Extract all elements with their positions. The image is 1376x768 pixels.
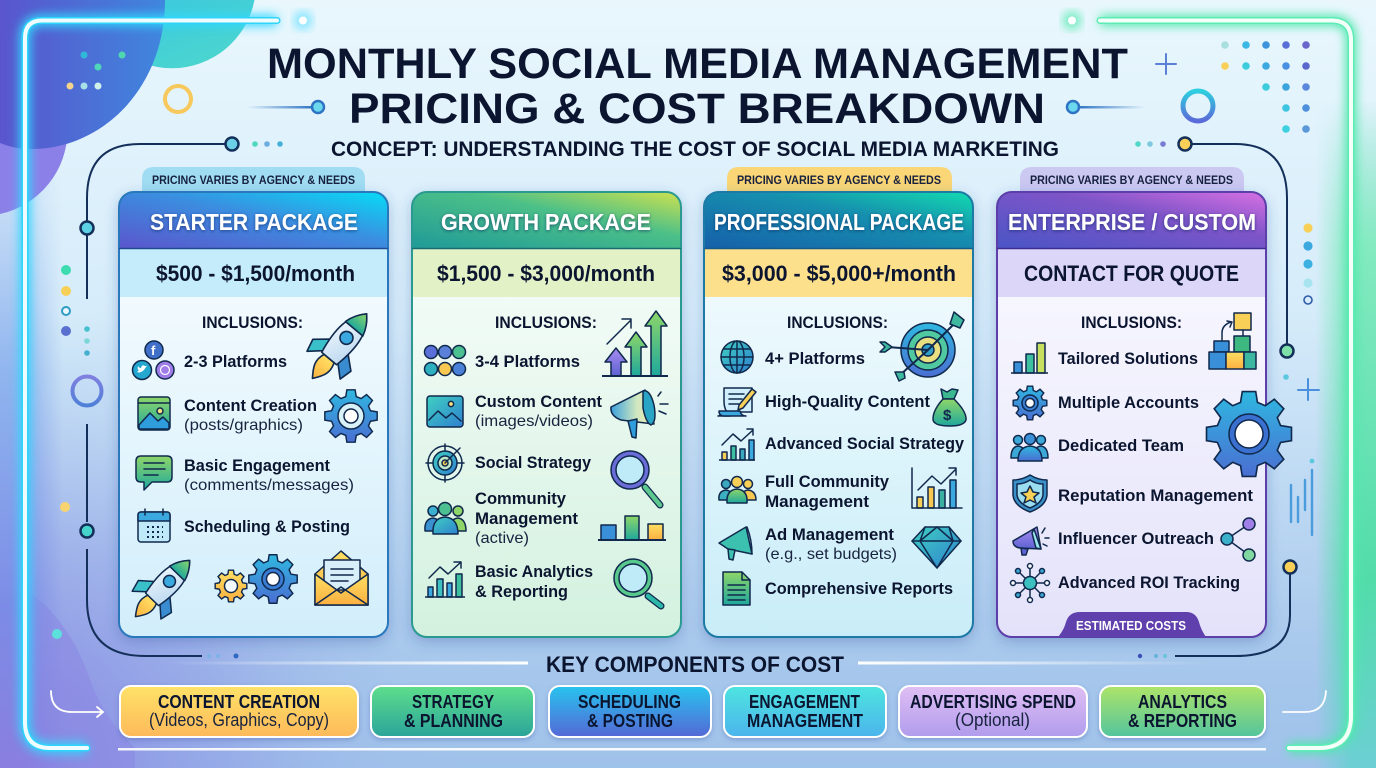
icon: globe [721,341,753,373]
icon: growth arrows [602,311,668,376]
icon: small bars [598,516,666,540]
inclusion: platforms: 2-3 Platforms [184,352,287,371]
pricing tab: PRICING VARIES BY AGENCY & NEEDS [737,173,941,187]
icon: small gear [1013,386,1047,420]
heading: PROFESSIONAL PACKAGE [714,209,964,235]
arrow left into components [51,691,103,717]
inclusion: high-quality content: High-Quality Content [765,392,930,411]
inclusion: full community management: Full Community [765,472,890,491]
inclusions label: INCLUSIONS: [202,313,303,332]
icon: money bag: $ [943,407,952,424]
icon: large gear [1207,392,1291,476]
icon: rising chart [719,429,755,460]
inclusion: basic engagement: (comments/messages) [184,477,354,494]
price: $500 - $1,500/month [156,261,355,286]
pricing tab [1020,167,1244,191]
inclusions label: INCLUSIONS: [1081,313,1182,332]
inclusion: dedicated team: Dedicated Team [1058,436,1184,455]
estimated costs tab [1058,612,1206,637]
panel: starter package [119,167,388,637]
heading: ENTERPRISE / CUSTOM [1008,209,1256,235]
plus sign right [1283,374,1319,400]
inclusion: basic engagement [184,456,354,494]
price: $1,500 - $3,000/month [437,261,655,286]
inclusion: basic analytics: Basic Analytics [475,562,593,581]
plus sign top-right [1156,54,1176,74]
pricing tab [727,167,952,191]
icon: gear with target [325,390,377,442]
inclusion: advanced roi tracking: Advanced ROI Tracking [1058,573,1240,592]
inclusion: community management: Community [475,489,567,508]
equalizer lines right [1291,460,1313,535]
inclusion: platforms: 3-4 Platforms [475,352,580,371]
heading: GROWTH PACKAGE [441,209,651,235]
icon: shield [1013,475,1047,512]
icon: money bag [933,389,966,426]
icon: document [723,572,750,605]
title connector left [247,101,324,113]
component: engagement management: ENGAGEMENT [749,692,860,712]
icon: bars [1011,343,1048,373]
inclusion: platforms: 4+ Platforms [765,349,865,368]
title connector right [1067,101,1145,113]
inclusion: tailored solutions: Tailored Solutions [1058,349,1198,368]
icon: analytics chart [425,562,465,597]
inclusion: comprehensive reports: Comprehensive Reports [765,579,953,598]
dot cluster top-left [66,52,126,90]
icon: megaphone [611,390,668,438]
icon: team [425,502,466,534]
decorative blobs top-left [0,0,254,214]
card body [412,192,681,637]
component: scheduling and posting [549,686,711,737]
component: advertising spend [899,686,1087,737]
heading: STARTER PACKAGE [150,209,358,235]
card body [119,192,388,637]
icon: magnifier purple [611,451,660,505]
estimated costs tab: ESTIMATED COSTS [1076,619,1186,633]
arrow right from components [1283,691,1326,712]
inclusion: multiple accounts: Multiple Accounts [1058,393,1199,412]
pricing tab [142,167,365,191]
icon: blue gear [249,555,297,603]
icon: envelope [315,551,368,605]
inclusion: scheduling: Scheduling & Posting [184,517,350,536]
inclusion: full community management: Management [765,492,869,511]
title: MONTHLY SOCIAL MEDIA MANAGEMENT [267,40,1128,88]
inclusion: ad management: (e.g., set budgets) [765,546,897,563]
inclusion: custom content: (images/videos) [475,413,593,430]
component: advertising spend: (Optional) [955,710,1030,730]
component: strategy and planning [371,686,534,737]
icon: scroll and pen [718,388,756,416]
icon: team blue [1011,434,1048,461]
price: $3,000 - $5,000+/month [722,261,956,286]
inclusion: ad management [765,525,897,563]
inclusion: community management [475,489,578,547]
inclusions label: INCLUSIONS: [787,313,888,332]
gradient ring left [72,376,102,406]
component: scheduling and posting: & POSTING [587,711,673,731]
inclusion: advanced social strategy: Advanced Social Strategy [765,434,965,453]
component: scheduling and posting: SCHEDULING [578,692,681,712]
inclusion: content creation: (posts/graphics) [184,417,303,434]
card body [704,192,973,637]
icon: image [427,396,463,427]
yellow ring [165,86,191,112]
side dots left [52,265,90,639]
bottom rule [118,748,1266,750]
icon: share nodes [1221,518,1255,561]
inclusion: basic analytics [475,562,593,601]
icon: yellow gear [215,570,247,602]
neon frame right [1063,12,1351,748]
connector line right [1135,138,1296,658]
icon: target [426,444,464,482]
icon: small rocket [119,545,206,633]
icon: diamond [912,527,961,568]
icon: axis chart [912,468,962,508]
card body [997,192,1266,637]
subtitle: CONCEPT: UNDERSTANDING THE COST OF SOCIAL MEDIA MARKETING [331,138,1059,161]
icon: megaphone purple [1013,527,1049,555]
component: content creation: (Videos, Graphics, Copy) [149,710,329,730]
icon: six platforms [424,346,466,376]
icon: chat bubble [136,456,172,490]
inclusion: ad management: Ad Management [765,525,894,544]
icon: magnifier teal [614,559,661,606]
icon: calendar [138,509,170,542]
inclusion: basic engagement: Basic Engagement [184,456,330,475]
inclusion: custom content [475,392,602,430]
panel: growth package [412,192,681,637]
component: advertising spend: ADVERTISING SPEND [910,692,1076,712]
icon: community team [719,476,756,503]
component: analytics and reporting [1100,686,1265,737]
title [267,40,1128,133]
component: content creation [120,686,358,737]
inclusion: community management: (active) [475,530,529,547]
connector line left [80,138,283,658]
component: strategy and planning: STRATEGY [412,692,494,712]
heading: key components: KEY COMPONENTS OF COST [546,652,845,677]
icon: social platforms: f [151,343,156,358]
component: engagement management: MANAGEMENT [747,711,863,731]
icon: image window [138,397,170,430]
inclusion: influencer outreach: Influencer Outreach [1058,529,1214,548]
inclusion: custom content: Custom Content [475,392,602,411]
inclusion: content creation: Content Creation [184,396,317,415]
component: strategy and planning: & PLANNING [404,711,503,731]
icon: target with arrows [880,312,964,381]
inclusions label: INCLUSIONS: [495,313,597,332]
inclusion: basic analytics: & Reporting [475,582,568,601]
icon: social platforms [132,341,174,380]
icon: stacked blocks [1209,313,1256,369]
icon: large rocket [293,298,386,394]
inclusion: full community management [765,472,890,511]
component: engagement management [724,686,886,737]
quote: CONTACT FOR QUOTE [1024,261,1239,286]
pricing tab: PRICING VARIES BY AGENCY & NEEDS [1030,173,1233,187]
title: PRICING & COST BREAKDOWN [349,85,1045,133]
pricing tab: PRICING VARIES BY AGENCY & NEEDS [152,173,355,187]
gradient ring top-right [1183,91,1213,121]
panel: enterprise custom [997,167,1291,637]
inclusion: content creation [184,396,317,434]
component: content creation: CONTENT CREATION [158,692,320,712]
component: analytics and reporting: ANALYTICS [1138,692,1227,712]
icon: network [1010,564,1050,602]
panel: professional package [704,167,973,637]
inclusion: social strategy: Social Strategy [475,453,592,472]
inclusion: community management: Management [475,509,578,528]
heading: key components [165,652,1210,677]
inclusion: reputation management: Reputation Management [1058,486,1253,505]
dot grid top-right [1221,41,1310,133]
side dots right [1303,223,1313,304]
component: analytics and reporting: & REPORTING [1128,711,1237,731]
icon: megaphone small [719,527,752,560]
neon frame left [25,12,312,748]
